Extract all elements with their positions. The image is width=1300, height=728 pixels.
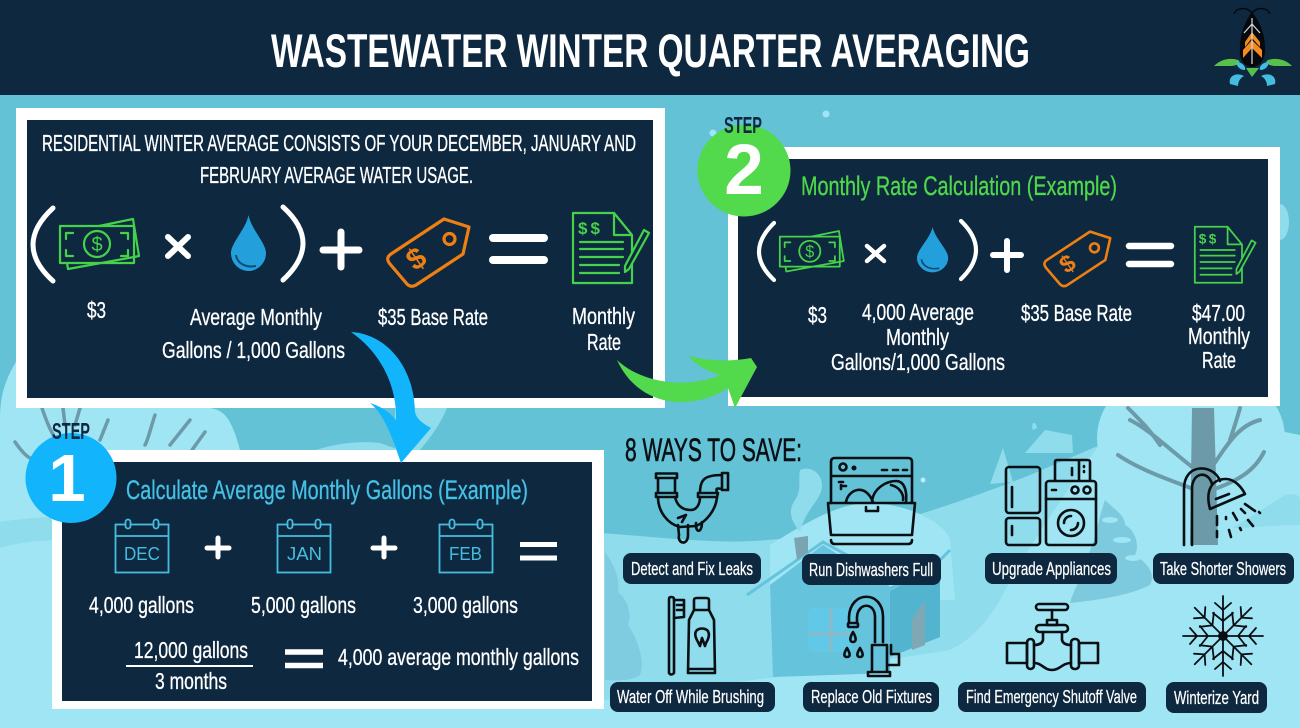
equals sign bbox=[493, 238, 544, 260]
equals sign bbox=[520, 544, 557, 558]
tip: detect and fix leaks bbox=[623, 473, 761, 584]
step 2 badge: STEP bbox=[724, 112, 762, 138]
formula labels: Gallons / 1,000 Gallons bbox=[162, 337, 345, 363]
monthly gallons labels bbox=[89, 592, 518, 618]
icon: shutoff valve bbox=[1007, 604, 1098, 670]
label bbox=[1153, 553, 1294, 584]
formula labels: $35 Base Rate bbox=[378, 304, 488, 330]
label: Winterize Yard bbox=[1174, 687, 1259, 708]
formula labels: $3 bbox=[87, 297, 106, 323]
plus sign bbox=[207, 538, 229, 557]
icon: faucet bbox=[844, 597, 899, 676]
step 2 badge: 2 bbox=[724, 131, 764, 210]
icon: bill document bbox=[573, 213, 649, 283]
right parenthesis bbox=[283, 207, 303, 280]
plus sign bbox=[323, 232, 359, 267]
icon: leaking pipe bbox=[656, 473, 728, 543]
icon: price tag: $ bbox=[1055, 249, 1082, 279]
icon: toothbrush and toothpaste bbox=[669, 597, 715, 674]
arrow: blue, formula to step 1 bbox=[351, 332, 431, 463]
icon: february calendar: FEB bbox=[449, 544, 482, 564]
fraction bbox=[126, 637, 253, 694]
tip: water off while brushing bbox=[610, 597, 775, 712]
label: Run Dishwashers Full bbox=[809, 559, 933, 580]
step 2 badge bbox=[698, 112, 790, 216]
icon: shower bbox=[1184, 468, 1260, 545]
formula labels: $47.00 bbox=[1192, 300, 1245, 326]
panel: step 2 monthly rate calculation bbox=[698, 112, 1280, 406]
icon: bill document: $$ bbox=[1199, 232, 1219, 247]
fraction: 3 months bbox=[155, 668, 227, 694]
panel: residential winter average formula bbox=[16, 108, 665, 408]
icon: price tag bbox=[388, 219, 469, 286]
multiply sign bbox=[168, 237, 188, 256]
tip: replace old fixtures bbox=[803, 597, 939, 712]
formula labels: Rate bbox=[1202, 347, 1236, 373]
step 1 badge: STEP bbox=[52, 418, 90, 444]
multiply sign bbox=[867, 246, 884, 261]
monthly gallons labels: 4,000 gallons bbox=[89, 592, 194, 618]
formula labels: 4,000 Average bbox=[862, 299, 974, 325]
result text: 4,000 average monthly gallons bbox=[338, 644, 579, 670]
left parenthesis bbox=[33, 208, 53, 281]
label: Replace Old Fixtures bbox=[811, 686, 932, 707]
icon: december calendar: DEC bbox=[124, 544, 160, 564]
heading: Calculate Average Monthly Gallons (Example) bbox=[126, 475, 528, 505]
formula labels bbox=[87, 297, 635, 363]
formula labels: $3 bbox=[808, 302, 827, 328]
formula labels: Monthly bbox=[1188, 323, 1250, 349]
icon: january calendar: JAN bbox=[287, 544, 322, 564]
formula labels bbox=[808, 299, 1250, 375]
step 1 badge: 1 bbox=[48, 441, 86, 516]
header bar bbox=[0, 0, 1300, 95]
plus sign bbox=[993, 241, 1021, 270]
icon: price tag bbox=[1044, 232, 1110, 286]
icon: december calendar bbox=[116, 520, 168, 572]
label: Water Off While Brushing bbox=[617, 686, 764, 707]
heading: Monthly Rate Calculation (Example) bbox=[801, 171, 1117, 201]
icon: appliances bbox=[1006, 460, 1096, 545]
formula labels: Monthly bbox=[886, 324, 949, 350]
label bbox=[958, 682, 1146, 712]
label: Find Emergency Shutoff Valve bbox=[966, 686, 1137, 707]
icon: february calendar bbox=[440, 520, 492, 572]
tip: take shorter showers bbox=[1153, 468, 1294, 584]
icon: cash bbox=[60, 219, 139, 269]
icon: cash: $ bbox=[91, 234, 103, 256]
step 1 badge bbox=[26, 418, 116, 523]
tip: upgrade appliances bbox=[985, 460, 1117, 584]
icon: water drop bbox=[231, 215, 266, 271]
tip: find emergency shutoff valve bbox=[958, 604, 1146, 712]
icon: logo bbox=[1214, 9, 1292, 86]
formula labels: Rate bbox=[587, 329, 621, 355]
monthly gallons labels: 3,000 gallons bbox=[413, 592, 518, 618]
label bbox=[610, 682, 775, 712]
heading: 8 ways to save: 8 WAYS TO SAVE: bbox=[625, 432, 802, 468]
icon: snowflake bbox=[1183, 596, 1263, 676]
monthly gallons labels: 5,000 gallons bbox=[251, 592, 356, 618]
intro text bbox=[42, 130, 636, 188]
right parenthesis bbox=[961, 221, 976, 279]
label: Upgrade Appliances bbox=[992, 558, 1111, 579]
left parenthesis bbox=[759, 223, 774, 280]
intro text: FEBRUARY AVERAGE WATER USAGE. bbox=[200, 162, 473, 188]
equals sign bbox=[285, 652, 323, 666]
icon: january calendar bbox=[278, 520, 330, 572]
icon: price tag: $ bbox=[400, 241, 433, 278]
icon: water drop bbox=[917, 227, 948, 272]
formula labels: $35 Base Rate bbox=[1021, 300, 1132, 326]
arrow: green, formula to step 2 bbox=[617, 356, 757, 408]
formula labels: Average Monthly bbox=[190, 304, 322, 330]
equals sign bbox=[1129, 246, 1171, 264]
intro text: RESIDENTIAL WINTER AVERAGE CONSISTS OF YOUR DECEMBER, JANUARY AND bbox=[42, 130, 636, 156]
tip: winterize yard bbox=[1166, 596, 1267, 713]
formula labels: Monthly bbox=[572, 303, 635, 329]
formula labels: Gallons/1,000 Gallons bbox=[831, 349, 1005, 375]
icon: dishwasher bbox=[828, 458, 915, 544]
tip: run dishwashers full bbox=[802, 458, 941, 585]
panel: step 1 calculate average monthly gallons bbox=[26, 418, 604, 709]
plus sign bbox=[373, 538, 395, 557]
icon: cash bbox=[780, 231, 844, 272]
icon: bill document bbox=[1195, 227, 1256, 283]
icon: bill document: $$ bbox=[578, 219, 603, 238]
fraction: 12,000 gallons bbox=[134, 637, 248, 663]
label: Detect and Fix Leaks bbox=[631, 558, 753, 579]
icon: cash: $ bbox=[805, 243, 814, 261]
